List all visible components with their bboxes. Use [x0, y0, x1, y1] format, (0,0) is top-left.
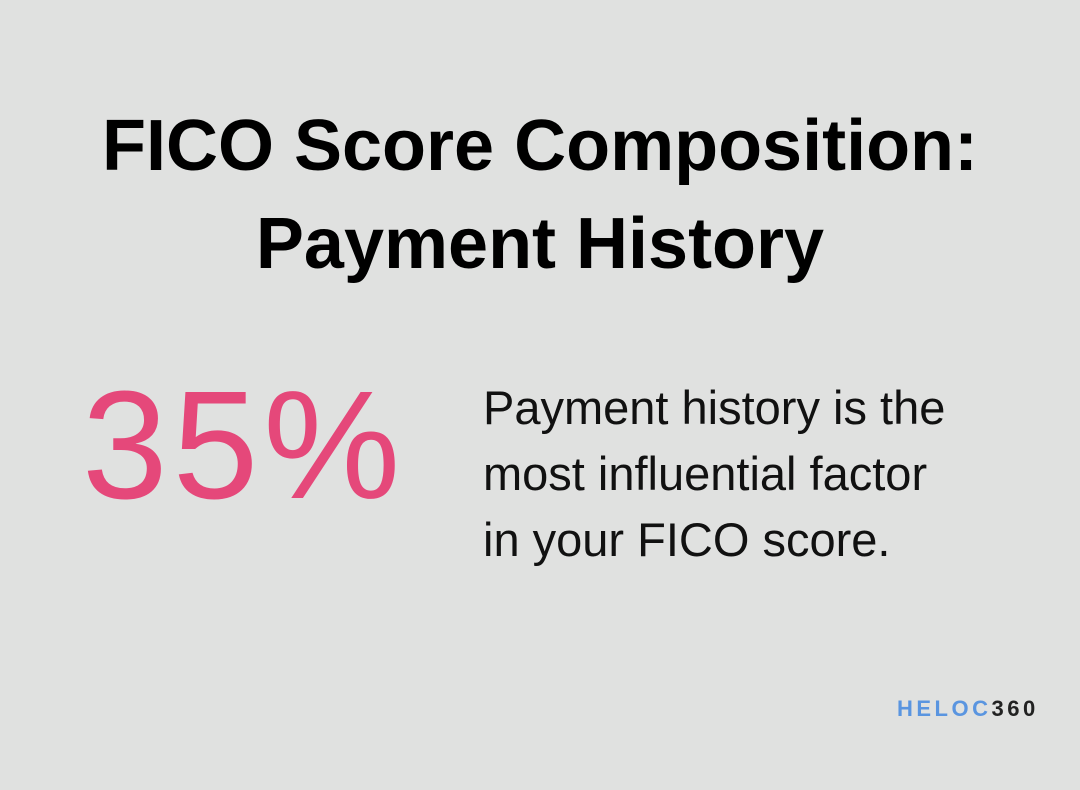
title: FICO Score Composition:	[102, 106, 978, 186]
description text	[483, 381, 945, 566]
description text: in your FICO score.	[483, 513, 890, 566]
title: Payment History	[256, 204, 824, 284]
description text: Payment history is the	[483, 381, 945, 434]
description text: most influential factor	[483, 447, 927, 500]
big stat: 35%	[82, 359, 405, 531]
logo: HELOC360	[897, 696, 1039, 721]
title	[102, 106, 978, 284]
